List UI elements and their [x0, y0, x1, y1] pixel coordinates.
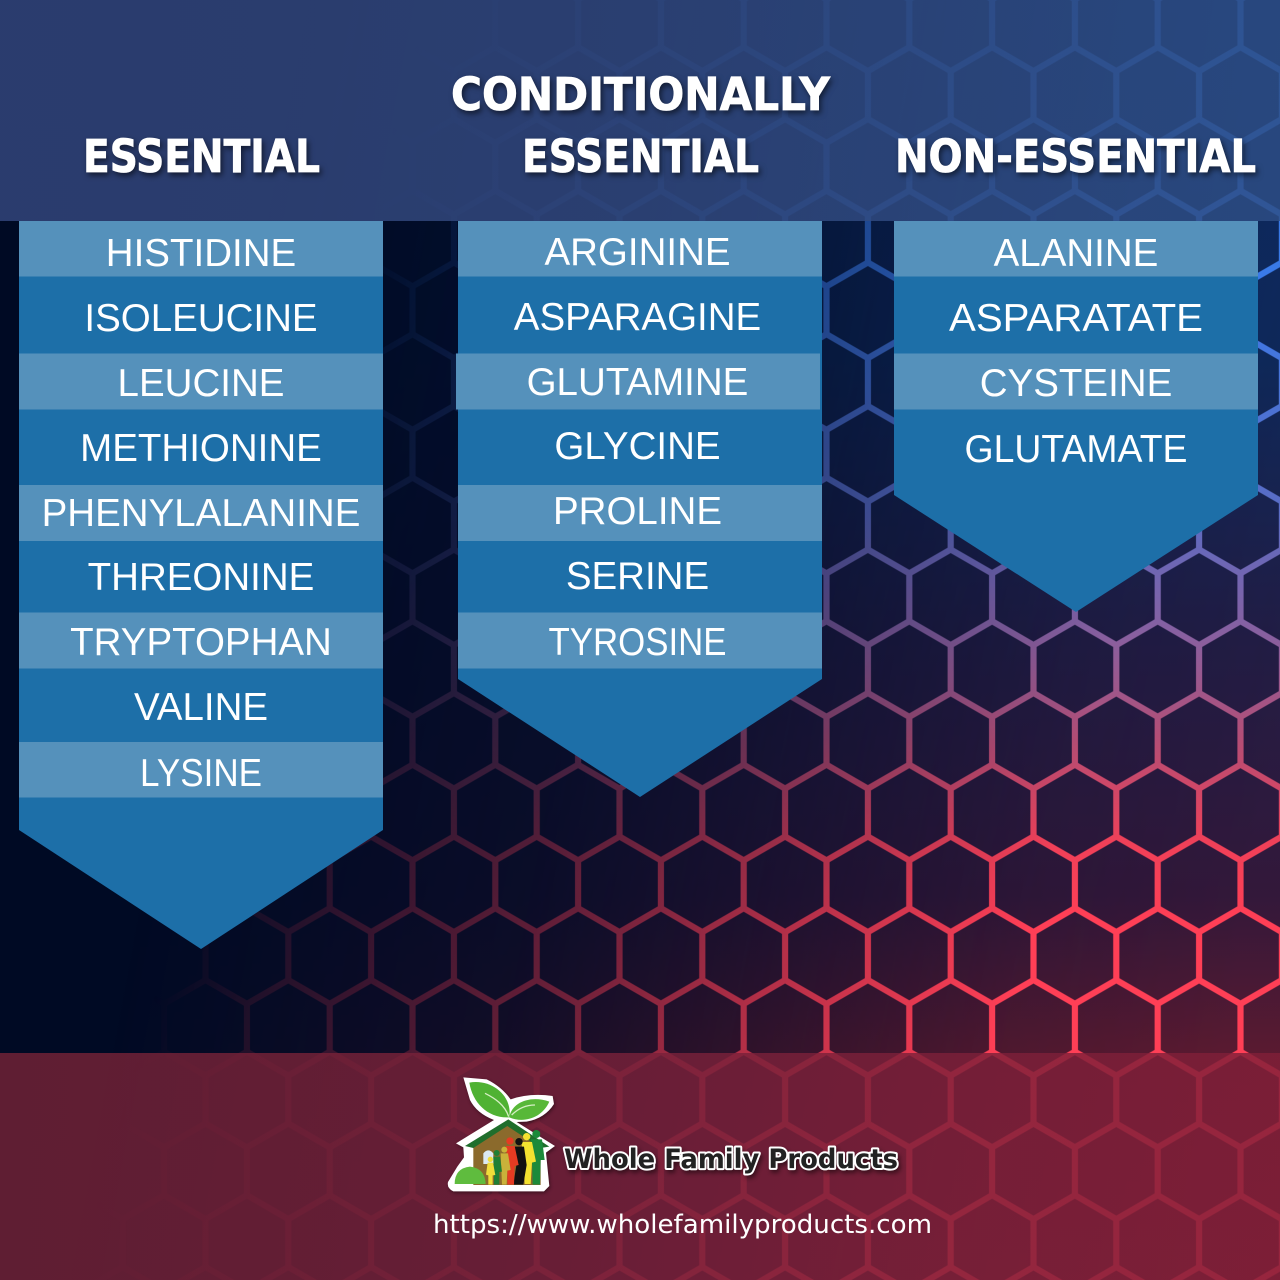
panel: essential amino acids: LYSINE: [140, 752, 262, 795]
heading: conditionally essential: CONDITIONALLY: [451, 68, 831, 121]
panel: conditionally essential amino acids: TYROSINE: [548, 621, 726, 664]
panel: conditionally essential amino acids: GLYCINE: [554, 425, 721, 468]
footer band: [0, 1053, 1280, 1280]
background: [294, 0, 1280, 1280]
panel: essential amino acids: VALINE: [134, 686, 268, 729]
panel: conditionally essential amino acids: GLUTAMINE: [527, 361, 748, 404]
panel: essential amino acids: ISOLEUCINE: [84, 297, 318, 340]
panel: essential amino acids: HISTIDINE: [106, 232, 296, 275]
panel: essential amino acids: TRYPTOPHAN: [70, 621, 332, 664]
heading: essential: ESSENTIAL: [83, 130, 320, 183]
panel: conditionally essential amino acids: SERINE: [566, 555, 709, 598]
logo: whole family products: [448, 1077, 898, 1191]
panel: non-essential amino acids: [894, 221, 1258, 612]
panel: essential amino acids: LEUCINE: [118, 362, 284, 405]
panel: conditionally essential amino acids: PROLINE: [553, 490, 722, 533]
website url: https://www.wholefamilyproducts.com: [433, 1210, 932, 1240]
panel: essential amino acids: THREONINE: [88, 556, 314, 599]
panel: conditionally essential amino acids: [456, 221, 822, 797]
panel: non-essential amino acids: CYSTEINE: [980, 362, 1172, 405]
panel: non-essential amino acids: ALANINE: [994, 232, 1158, 275]
logo wordmark: Whole Family Products: [564, 1144, 898, 1175]
panel: conditionally essential amino acids: ASPARAGINE: [514, 296, 761, 339]
icon: house with leaves and family: [448, 1077, 555, 1191]
header band: [0, 0, 1280, 221]
panel: non-essential amino acids: ASPARATATE: [949, 297, 1203, 340]
panel: conditionally essential amino acids: ARGININE: [544, 231, 731, 274]
panel: essential amino acids: METHIONINE: [80, 427, 322, 470]
panel: essential amino acids: PHENYLALANINE: [42, 492, 360, 535]
panel: essential amino acids: [19, 221, 383, 949]
panel: non-essential amino acids: GLUTAMATE: [964, 428, 1188, 471]
heading: conditionally essential: ESSENTIAL: [522, 130, 759, 183]
heading: conditionally essential: [451, 68, 831, 183]
